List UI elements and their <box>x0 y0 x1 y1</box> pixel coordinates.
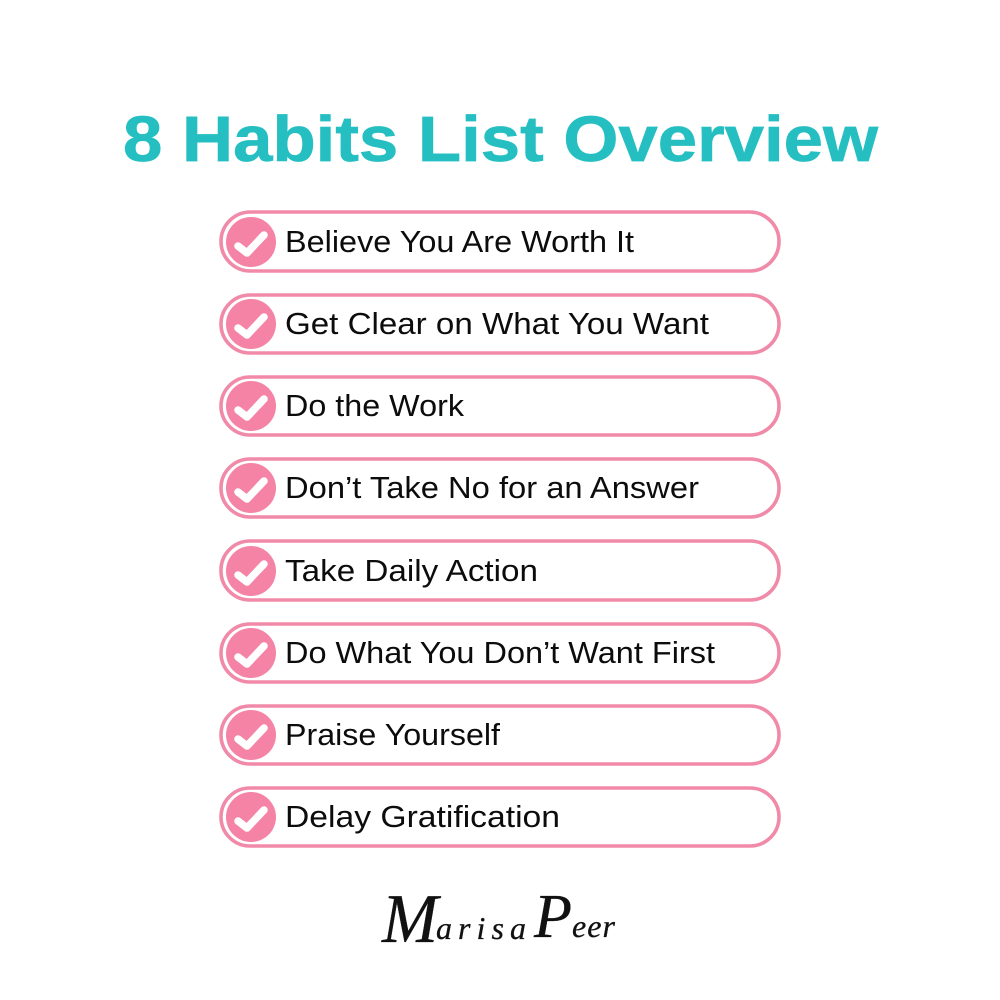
signature: arisa <box>436 910 526 946</box>
item 6: Do What You Don't Want First <box>221 624 779 682</box>
title: 8 Habits List Overview <box>123 103 878 175</box>
item 2: Get Clear on What You Want <box>221 295 779 353</box>
item 8: Delay Gratification <box>221 788 779 846</box>
signature: M <box>381 881 442 958</box>
item 4: Don't Take No for an Answer: Don’t Take No for an Answer <box>285 470 699 505</box>
item 5: Take Daily Action <box>221 541 779 600</box>
item 5: Take Daily Action: Take Daily Action <box>285 553 538 588</box>
item 2: Get Clear on What You Want: Get Clear on What You Want <box>285 306 709 341</box>
item 8: Delay Gratification: Delay Gratification <box>285 799 560 834</box>
item 4: Don't Take No for an Answer <box>221 459 779 517</box>
item 3: Do the Work <box>221 377 779 435</box>
signature: P <box>533 883 572 951</box>
item 3: Do the Work: Do the Work <box>285 388 465 423</box>
checklist <box>221 212 779 846</box>
item 1: Believe You Are Worth It: Believe You Are Worth It <box>285 224 634 259</box>
item 1: Believe You Are Worth It <box>221 212 779 271</box>
signature: eer <box>572 908 616 944</box>
signature <box>381 881 616 958</box>
item 7: Praise Yourself <box>221 706 779 764</box>
item 7: Praise Yourself: Praise Yourself <box>285 717 500 752</box>
item 6: Do What You Don't Want First: Do What You Don’t Want First <box>285 635 715 670</box>
